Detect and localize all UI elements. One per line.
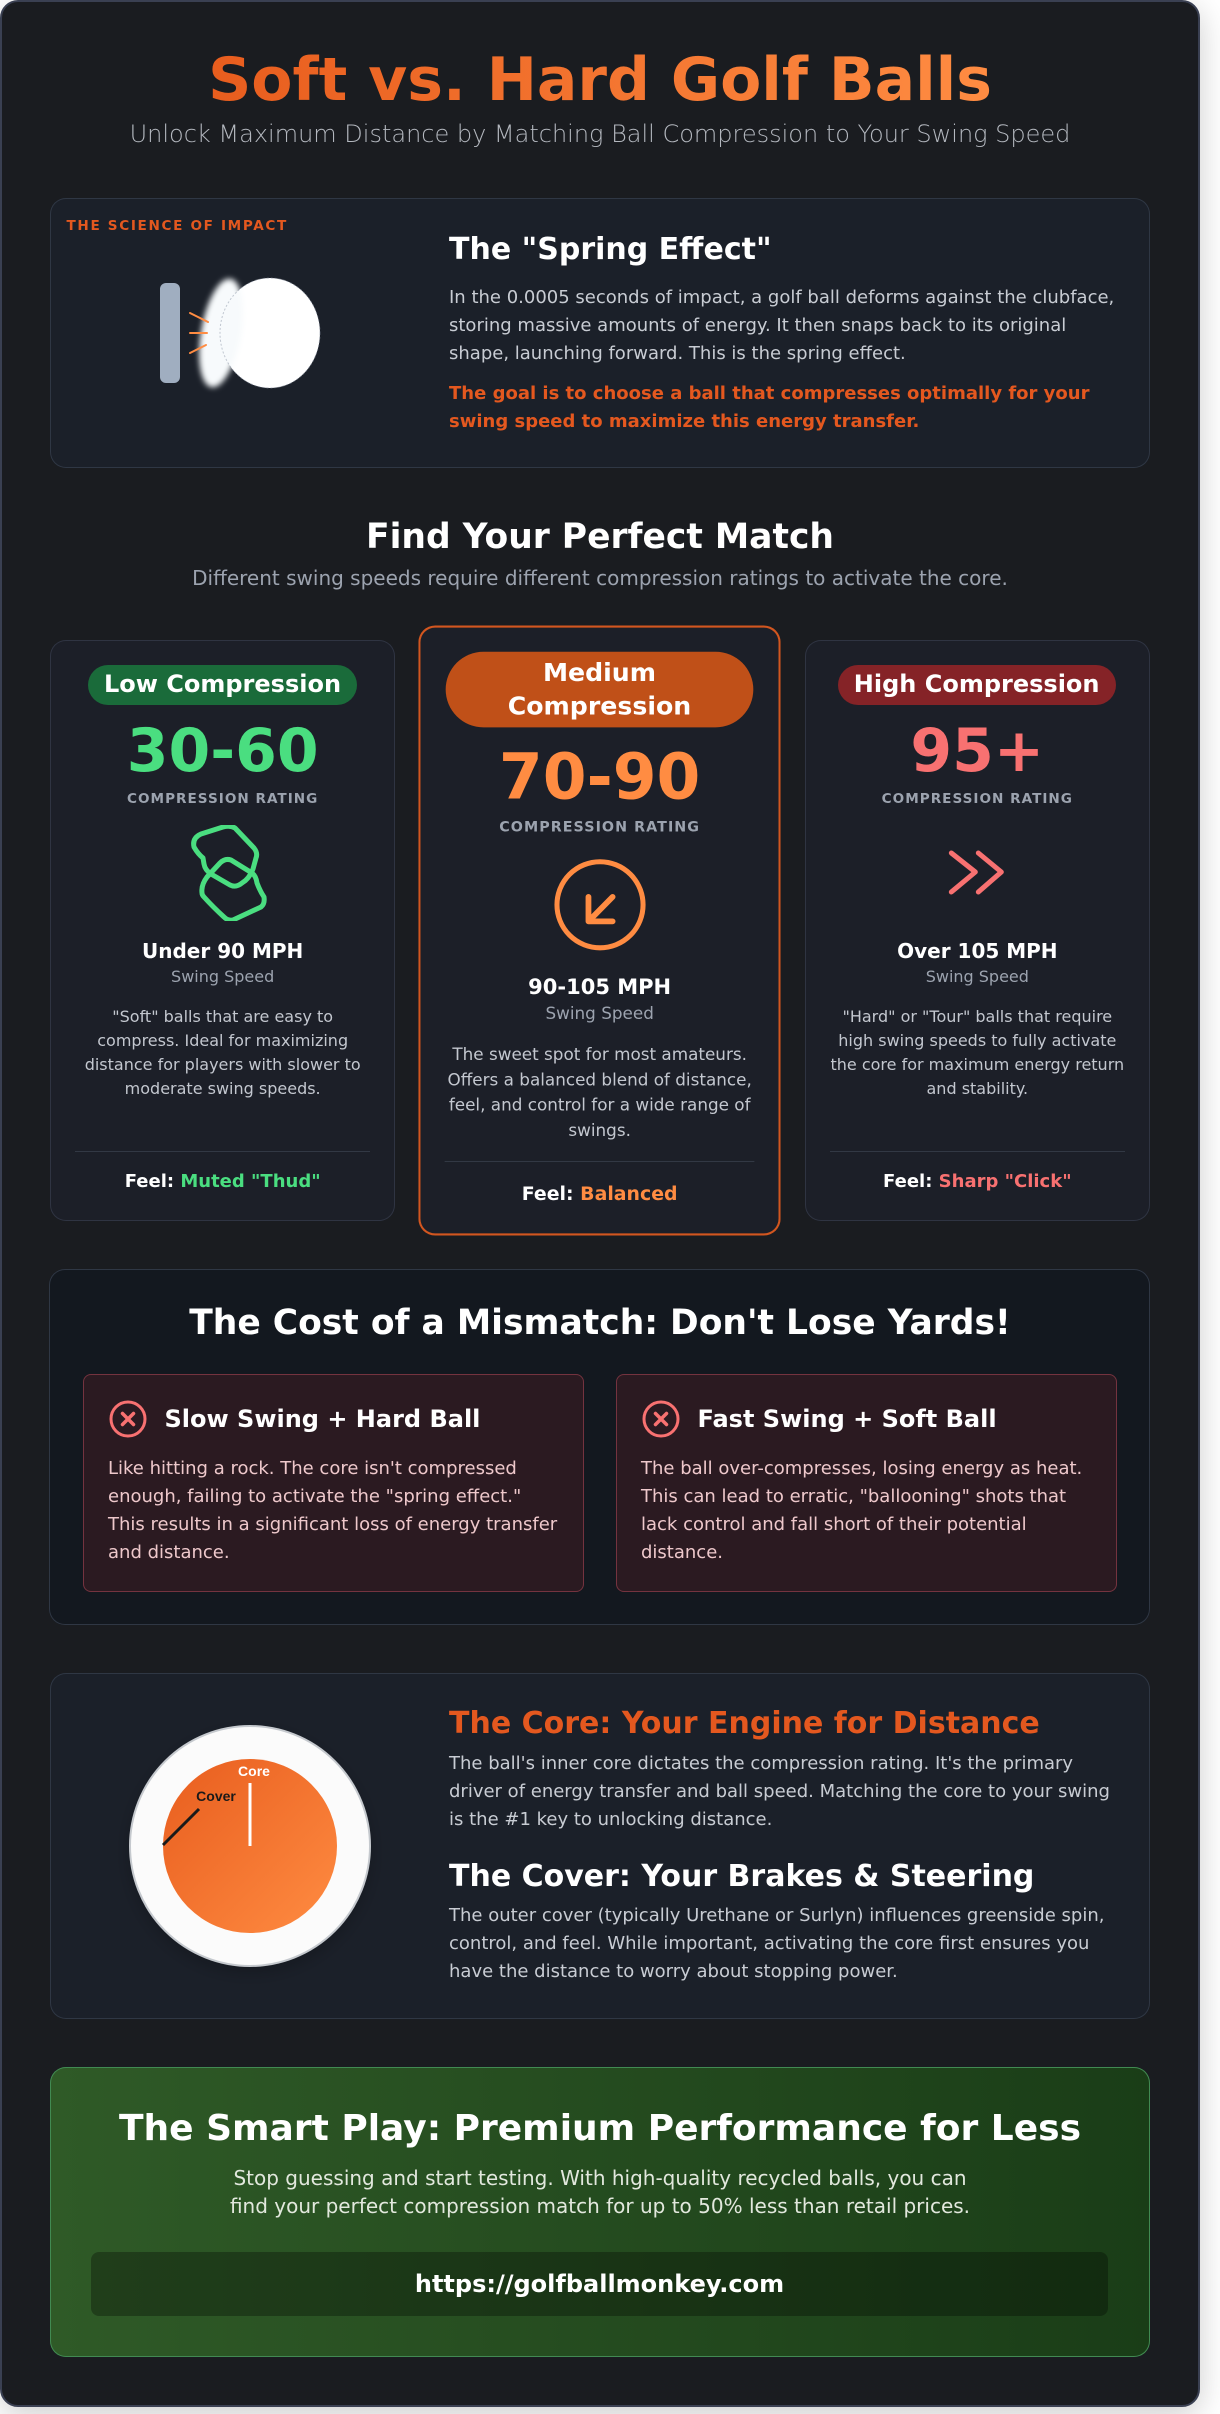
icon: x in circle — [642, 1400, 680, 1438]
heading: spring effect: The "Spring Effect" — [449, 232, 772, 266]
swing speed: 90-105 mph: 90-105 MPH — [529, 974, 671, 999]
description: feel, and control for a wide range of — [449, 1095, 751, 1115]
description — [448, 1044, 752, 1140]
text: fast swing — [640, 1458, 1082, 1563]
swing speed: over 105 mph: Over 105 MPH — [897, 939, 1058, 963]
text: slow swing: This results in a significant loss of energy transfer — [108, 1514, 557, 1535]
badge: medium compression — [446, 652, 754, 727]
label: compression rating: COMPRESSION RATING — [500, 819, 700, 835]
heading: fast swing: Fast Swing + Soft Ball — [698, 1405, 997, 1433]
illustration: club striking a compressed ball — [160, 274, 320, 392]
text: spring effect explanation — [449, 287, 1114, 364]
text: recycled balls: find your perfect compression match for up to 50% less than retail prices. — [230, 2194, 970, 2218]
rating: 70-90: 70-90 — [499, 741, 701, 814]
panel: core and cover — [50, 1673, 1150, 2019]
text: fast swing: distance. — [641, 1542, 723, 1563]
label: compression rating: COMPRESSION RATING — [882, 791, 1073, 807]
feel: balanced: Feel: Balanced — [522, 1182, 678, 1205]
text: slow swing: Like hitting a rock. The core isn't compressed — [108, 1458, 517, 1479]
text: the core: driver of energy transfer and ball speed. Matching the core to your swing — [449, 1781, 1110, 1802]
badge: high compression — [838, 665, 1116, 705]
swing speed: under 90 mph: Under 90 MPH — [142, 939, 303, 963]
diagram: ball cross-section — [129, 1725, 371, 1967]
text: fast swing: lack control and fall short of their potential — [641, 1514, 1027, 1535]
text: the cover — [448, 1905, 1104, 1982]
badge: medium compression: Compression — [508, 692, 692, 721]
text: fast swing: This can lead to erratic, "ballooning" shots that — [641, 1486, 1066, 1507]
text: slow swing: and distance. — [108, 1542, 230, 1563]
description: distance for players with slower to — [85, 1055, 361, 1074]
feel: muted thud: Feel: Muted "Thud" — [125, 1171, 321, 1192]
callout: goal: swing speed to maximize this energy transfer. — [449, 411, 919, 432]
panel: fast swing soft ball — [616, 1374, 1117, 1592]
card: medium compression (featured) — [419, 625, 781, 1236]
text: spring effect explanation: storing massive amounts of energy. It then snaps back to its original — [449, 315, 1066, 336]
description: swings. — [569, 1120, 631, 1140]
heading: the cover: The Cover: Your Brakes & Steering — [449, 1859, 1034, 1894]
description — [830, 1007, 1124, 1098]
link: website — [91, 2252, 1108, 2316]
badge: medium compression: Medium — [543, 658, 656, 687]
text: fast swing: The ball over-compresses, losing energy as heat. — [641, 1458, 1082, 1479]
badge: low compression — [88, 665, 357, 705]
text: spring effect explanation: In the 0.0005 seconds of impact, a golf ball deforms against the clubface, — [449, 287, 1114, 308]
title: Soft vs. Hard Golf Balls — [208, 45, 992, 115]
link: website: https://golfballmonkey.com — [415, 2270, 784, 2298]
text: recycled balls — [230, 2166, 970, 2218]
icon: double chevron — [948, 850, 1004, 894]
divider — [75, 1151, 370, 1152]
section heading: perfect match: Find Your Perfect Match — [366, 517, 834, 557]
text: the core: The ball's inner core dictates the compression rating. It's the primary — [449, 1753, 1073, 1774]
section subheading: Different swing speeds require different compression ratings to activate the core. — [192, 566, 1008, 590]
callout: goal — [449, 383, 1090, 432]
subtitle: Unlock Maximum Distance by Matching Ball Compression to Your Swing Speed — [130, 120, 1070, 148]
description: the core for maximum energy return — [830, 1055, 1124, 1074]
text: spring effect explanation: shape, launching forward. This is the spring effect. — [449, 343, 906, 364]
badge: high compression: High Compression — [854, 670, 1100, 698]
heading: slow swing: Slow Swing + Hard Ball — [164, 1405, 480, 1433]
text: the cover: have the distance to worry about stopping power. — [449, 1961, 898, 1982]
panel: spring effect — [50, 198, 1150, 468]
diagram: ball cross-section: Core — [238, 1763, 270, 1779]
card: low compression — [50, 640, 395, 1221]
description: high swing speeds to fully activate — [838, 1031, 1116, 1050]
card: high compression — [805, 640, 1150, 1221]
description — [85, 1007, 361, 1098]
divider — [830, 1151, 1125, 1152]
description: The sweet spot for most amateurs. — [453, 1044, 747, 1064]
rating: 95+: 95+ — [910, 716, 1044, 786]
rating: 30-60: 30-60 — [127, 716, 319, 786]
text: the cover: The outer cover (typically Urethane or Surlyn) influences greenside spin, — [449, 1905, 1104, 1926]
description: "Hard" or "Tour" balls that require — [842, 1007, 1112, 1026]
text: slow swing: enough, failing to activate the "spring effect." — [108, 1486, 521, 1507]
description: Offers a balanced blend of distance, — [448, 1070, 752, 1090]
description: and stability. — [926, 1079, 1028, 1098]
label: swing speed: Swing Speed — [926, 967, 1029, 986]
text: the core — [448, 1753, 1110, 1830]
heading: cost of a mismatch: The Cost of a Mismatch: Don't Lose Yards! — [189, 1303, 1011, 1343]
diagram: ball cross-section: Cover — [196, 1788, 236, 1804]
heading: the smart play: The Smart Play: Premium Performance for Less — [119, 2108, 1081, 2149]
label: science of impact: THE SCIENCE OF IMPACT — [66, 218, 288, 234]
text: recycled balls: Stop guessing and start testing. With high-quality recycled balls, you can — [233, 2166, 967, 2190]
label: swing speed: Swing Speed — [171, 967, 274, 986]
description: compress. Ideal for maximizing — [97, 1031, 348, 1050]
text: slow swing — [108, 1458, 558, 1563]
label: compression rating: COMPRESSION RATING — [127, 791, 318, 807]
description: "Soft" balls that are easy to — [112, 1007, 333, 1026]
text: the cover: control, and feel. While important, activating the core first ensures you — [449, 1933, 1089, 1954]
heading: the core: The Core: Your Engine for Distance — [449, 1706, 1040, 1741]
divider — [445, 1161, 755, 1162]
icon: x in circle — [110, 1400, 146, 1438]
panel: the smart play — [50, 2067, 1150, 2357]
badge: low compression: Low Compression — [104, 670, 341, 698]
icon: compress arrow in circle — [554, 859, 646, 950]
panel: slow swing hard ball — [83, 1374, 584, 1592]
icon: soft overlapping shapes — [191, 825, 267, 921]
panel: cost of a mismatch — [49, 1269, 1150, 1625]
callout: goal: The goal is to choose a ball that compresses optimally for your — [449, 383, 1089, 404]
text: the core: is the #1 key to unlocking distance. — [449, 1809, 772, 1830]
label: swing speed: Swing Speed — [546, 1003, 654, 1023]
description: moderate swing speeds. — [125, 1079, 321, 1098]
feel: sharp click: Feel: Sharp "Click" — [883, 1171, 1072, 1192]
